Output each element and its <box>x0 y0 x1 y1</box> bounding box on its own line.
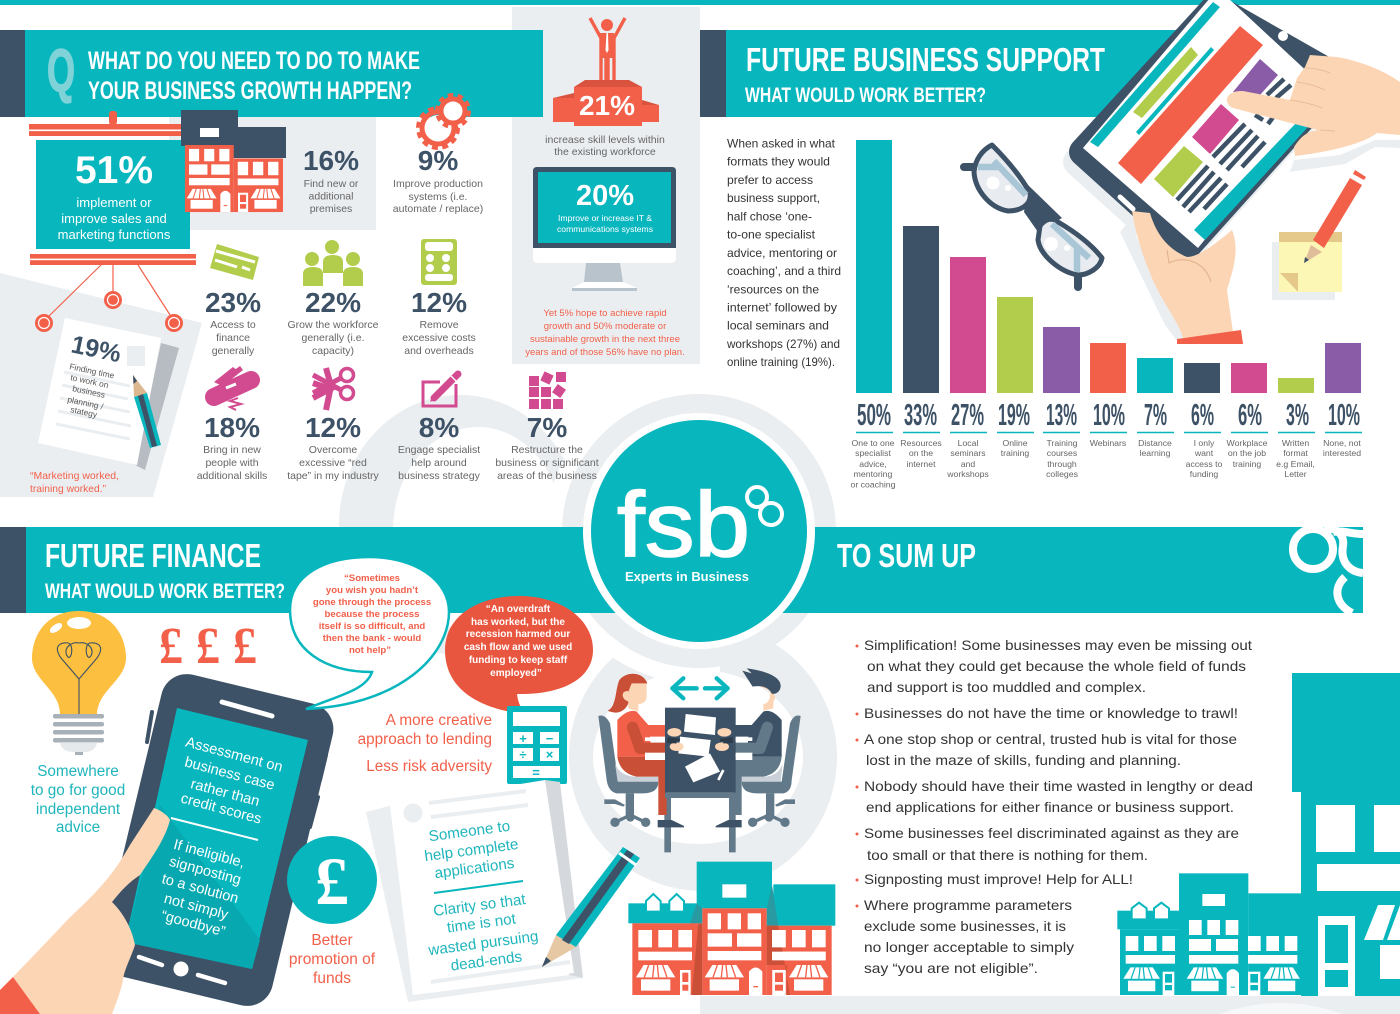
note page: 19% planning: 19% <box>69 330 124 368</box>
note: growth plans: Yet 5% hope to achieve rapid <box>543 308 667 319</box>
fsb logo <box>583 413 815 649</box>
bar labels: interested <box>1323 448 1361 458</box>
bar values: 7% <box>1144 397 1167 432</box>
strapline: Experts in Business <box>625 570 749 584</box>
summary bullet list: and support is too muddled and complex. <box>867 679 1146 695</box>
heading line 2: YOUR BUSINESS GROWTH HAPPEN? <box>88 77 412 105</box>
bar labels: internet <box>907 459 936 469</box>
phone text: Assessment on <box>184 734 284 776</box>
stat: 12% remove costs: Remove <box>419 319 459 331</box>
pound coin <box>287 836 377 924</box>
bar values: 50% <box>857 397 891 432</box>
bar labels: Letter <box>1284 469 1307 479</box>
note page: 19% planning: stategy <box>70 404 99 420</box>
man chair <box>742 715 801 827</box>
stat: 9% production systems: systems (i.e. <box>409 191 467 203</box>
summary bullet list: Where programme parameters <box>864 897 1072 913</box>
bar labels: Training <box>1046 438 1078 448</box>
bar labels: Written <box>1282 438 1309 448</box>
stat: 22% grow the workforce: generally (i.e. <box>301 332 365 344</box>
header: growth question <box>0 30 543 117</box>
bar labels: training <box>1001 448 1029 458</box>
bar chart: preferred support formats <box>851 140 1362 490</box>
text: independent advice: independent <box>36 801 121 818</box>
text: better promotion <box>289 932 376 987</box>
grey panel behind 16% stat <box>169 117 376 230</box>
stat: 8% specialist help: help around <box>411 457 467 469</box>
stat: 18% new people: Bring in new <box>203 444 261 456</box>
icon: calculator green <box>421 239 457 285</box>
grey disc behind meeting scene <box>569 623 837 891</box>
note page: 19% planning <box>38 318 179 470</box>
bar labels: Online <box>1002 438 1028 448</box>
right hand <box>1227 55 1400 156</box>
tablet with hands <box>1083 0 1400 344</box>
pound signs: £ <box>233 618 257 675</box>
bar values: 10% <box>1328 397 1360 432</box>
phone text: credit scores <box>179 791 263 828</box>
summary bullet list: exclude some businesses, it is <box>864 918 1066 934</box>
speech bubble: overdraft: has worked, but the <box>471 617 565 628</box>
bar values: 6% <box>1238 397 1262 432</box>
quote: marketing worked: “Marketing worked, <box>30 471 119 482</box>
bar labels: Distance <box>1138 438 1172 448</box>
icon: calculator teal: ÷ <box>519 747 527 762</box>
bar labels: access to <box>1186 459 1223 469</box>
woman chair <box>598 715 658 827</box>
intro paragraph: business support: internet’ followed by <box>727 301 837 315</box>
speech bubble: overdraft: cash flow and we used <box>464 642 572 653</box>
intro paragraph: business support: online training (19%). <box>727 355 835 369</box>
bar labels: on the <box>909 448 933 458</box>
document: applications and clarity: time is not <box>446 910 518 936</box>
large teal building <box>1292 673 1400 996</box>
note: growth plans <box>525 308 685 358</box>
stat: 18% new people: 18% <box>204 412 260 443</box>
speech bubble: overdraft <box>445 596 593 714</box>
stat: 18% new people: people with <box>205 457 259 469</box>
speech bubble: process: itself is so difficult, and <box>319 621 425 632</box>
grey panel behind 21% and 20% stats <box>512 7 700 364</box>
speech bubble: process: then the bank - would <box>323 633 421 644</box>
text: creative lending: Less risk adversity <box>366 758 492 775</box>
bar labels: None, not <box>1323 438 1361 448</box>
stat: 12% red tape <box>287 412 380 482</box>
grey ring around logo <box>562 394 836 668</box>
intro paragraph: business support: local seminars and <box>727 319 829 333</box>
stat: 16% premises: premises <box>310 203 352 215</box>
caption: 21% skill levels: the existing workforce <box>554 146 656 158</box>
pound signs <box>159 618 257 675</box>
icon: multi-tool <box>214 366 251 410</box>
stat: 9% production systems: automate / replace) <box>393 203 483 215</box>
header: future business support <box>700 30 1190 117</box>
header: future finance <box>0 527 1363 613</box>
coral shops <box>628 862 835 995</box>
note: growth plans: growth and 50% moderate or <box>544 321 666 332</box>
stat: 8% specialist help: Engage specialist <box>398 444 480 456</box>
speech bubble: process: gone through the process <box>313 597 431 608</box>
pound signs: £ <box>159 618 183 675</box>
summary bullet list <box>856 637 1253 976</box>
sign: 51% sales and marketing: implement or <box>76 195 152 210</box>
icon: scissors <box>313 368 354 410</box>
quote: marketing worked: training worked.” <box>30 484 107 495</box>
intro paragraph: business support: to-one specialist <box>727 228 816 242</box>
stat: 8% specialist help <box>398 412 481 482</box>
stat: 7% restructure <box>495 412 599 482</box>
fsb wordmark: fsb <box>617 474 750 576</box>
bar labels: Webinars <box>1090 438 1127 448</box>
stat: 16% premises <box>303 145 359 215</box>
phone with hand <box>0 669 339 1014</box>
teal shops <box>1117 873 1305 995</box>
grey panel behind note page <box>0 273 202 497</box>
bar labels: colleges <box>1046 469 1079 479</box>
note page: 19% planning: Finding time <box>69 361 116 381</box>
icon: calculator teal: = <box>532 765 540 780</box>
monitor: 20% IT systems: Improve or increase IT & <box>558 213 652 223</box>
document: applications and clarity: help complete <box>423 836 519 865</box>
intro paragraph: business support: advice, mentoring or <box>727 246 837 260</box>
pound signs: £ <box>196 618 220 675</box>
white band around logo ring <box>554 459 720 678</box>
stat: 22% grow the workforce: 22% <box>305 287 361 318</box>
man <box>716 668 782 827</box>
title: FUTURE BUSINESS SUPPORT <box>746 41 1105 78</box>
summary bullet list: Signposting must improve! Help for ALL! <box>864 871 1133 887</box>
bar labels: I only <box>1194 438 1215 448</box>
bar values: 27% <box>951 397 984 432</box>
pound coin: £ <box>315 843 349 919</box>
intro paragraph: business support: workshops (27%) and <box>726 337 840 351</box>
speech bubble: process: not help” <box>349 645 391 656</box>
summary bullet list: no longer acceptable to simply <box>864 939 1074 955</box>
text: better promotion: funds <box>313 970 351 987</box>
icon: calculator teal <box>507 706 567 784</box>
summary bullet list: on what they could get because the whole field of funds <box>867 658 1246 674</box>
stat: 7% restructure: business or significant <box>495 457 599 469</box>
bar values: 13% <box>1046 397 1077 432</box>
document: applications and clarity: Clarity so that <box>432 891 527 920</box>
bar labels: training <box>1233 459 1261 469</box>
summary bullet list: Businesses do not have the time or knowledge to trawl! <box>864 705 1238 721</box>
bar values: 19% <box>998 397 1030 432</box>
text: independent advice <box>31 763 125 836</box>
to sum up heading: TO SUM UP <box>837 537 976 574</box>
lower hand <box>1132 211 1236 338</box>
quote: marketing worked <box>30 471 119 495</box>
document: applications and clarity <box>366 780 583 1002</box>
intro paragraph: business support: prefer to access <box>727 173 813 187</box>
summary bullet list: end applications for either finance or business support. <box>866 799 1234 815</box>
bar labels: workshops <box>946 469 989 479</box>
summary bullet list: Some businesses feel discriminated against as they are <box>864 825 1239 841</box>
sign: 51% sales and marketing: marketing functions <box>58 227 171 242</box>
stat: 9% production systems <box>393 145 483 215</box>
text: creative lending: approach to lending <box>358 731 492 748</box>
stat: 16% premises: 16% <box>303 145 359 176</box>
heading line 1: WHAT DO YOU NEED TO DO TO MAKE <box>88 47 420 75</box>
intro paragraph: business support: formats they would <box>727 155 830 169</box>
bar labels: or coaching <box>851 480 896 490</box>
text: better promotion: promotion of <box>289 951 376 968</box>
stat: 22% grow the workforce: Grow the workforce <box>287 319 379 331</box>
stat: 12% remove costs: 12% <box>411 287 467 318</box>
phone text: business case <box>183 754 276 794</box>
arrows <box>672 678 728 698</box>
bar labels: learning <box>1140 448 1171 458</box>
pencil teal <box>542 847 640 967</box>
sign: 51% sales and marketing: improve sales and <box>61 211 167 226</box>
bar labels: One to one <box>852 438 895 448</box>
caption: 21% skill levels: increase skill levels within <box>545 134 665 146</box>
bar values: 6% <box>1191 397 1214 432</box>
intro paragraph: business support <box>726 136 841 369</box>
phone text <box>159 734 284 940</box>
stat: 12% remove costs <box>402 287 476 357</box>
document: applications and clarity: dead-ends <box>450 948 524 975</box>
sleeve <box>1177 330 1243 344</box>
stat: 12% red tape: 12% <box>305 412 361 443</box>
bar values: 10% <box>1093 397 1125 432</box>
bar labels: want <box>1194 448 1214 458</box>
summary bullet list: A one stop shop or central, trusted hub is vital for those <box>864 731 1237 747</box>
icon: blocks <box>529 371 566 409</box>
icon: calculator teal: − <box>546 731 554 746</box>
stat: 12% remove costs: and overheads <box>404 345 474 357</box>
document: applications and clarity: Someone to <box>428 818 511 845</box>
speech bubble: process <box>290 557 449 709</box>
bar labels: courses <box>1047 448 1078 458</box>
intro paragraph: business support: half chose ‘one- <box>727 209 812 223</box>
bar values: 33% <box>904 397 937 432</box>
speech bubble: process: because the process <box>325 609 419 620</box>
phone text: rather than <box>189 776 261 810</box>
stat: 22% grow the workforce <box>287 287 379 357</box>
note page: 19% planning: to work on <box>70 372 110 390</box>
intro paragraph: business support: business support, <box>727 191 820 205</box>
stat: 18% new people <box>197 412 267 482</box>
text: independent advice: to go for good <box>31 782 125 799</box>
sign: 51% sales and marketing <box>29 111 196 332</box>
phone text: to a solution <box>160 871 240 907</box>
phone text: signposting <box>167 854 243 888</box>
subtitle: WHAT WOULD WORK BETTER? <box>745 84 986 107</box>
letter Q: Q <box>47 37 75 104</box>
phone text: If ineligible, <box>172 837 246 871</box>
table <box>665 708 736 793</box>
text: better promotion: Better <box>311 932 353 949</box>
speech bubble: overdraft: recession harmed our <box>466 629 570 640</box>
note page: 19% planning: business <box>72 383 106 400</box>
icon: calculator teal: + <box>519 731 527 746</box>
document: applications and clarity: wasted pursuing <box>426 928 539 959</box>
icon: person on podium <box>553 18 659 126</box>
stat: 18% new people: additional skills <box>197 470 267 482</box>
stat: 12% red tape: Overcome <box>309 444 357 456</box>
text: independent advice: Somewhere <box>37 763 119 780</box>
sticky note with pencil <box>1272 170 1366 300</box>
stat: 23% access to finance: finance <box>216 332 250 344</box>
bar values <box>857 397 1360 432</box>
text: independent advice: advice <box>56 819 100 836</box>
title: FUTURE FINANCE <box>45 537 261 574</box>
stat: 22% grow the workforce: capacity) <box>312 345 354 357</box>
icon: shop building <box>181 110 286 212</box>
subtitle: WHAT WOULD WORK BETTER? <box>45 580 285 603</box>
speech bubble: overdraft: funding to keep staff <box>469 655 568 666</box>
speech bubble: overdraft: employed” <box>490 668 542 679</box>
bar labels: e.g Email, <box>1276 459 1315 469</box>
bar labels: funding <box>1190 469 1218 479</box>
note: growth plans: years and of those 56% have no plan. <box>525 347 685 358</box>
summary bullet list: Simplification! Some businesses may even be missing out <box>864 637 1252 653</box>
stat: 16% premises: Find new or <box>304 178 359 190</box>
caption: 21% skill levels <box>545 134 665 158</box>
header corner logo mark <box>1293 529 1363 613</box>
intro paragraph: business support: ‘resources on the <box>727 282 819 296</box>
stat: 16% premises: additional <box>309 190 353 202</box>
bar labels: mentoring <box>854 469 892 479</box>
sleeve <box>0 977 40 1014</box>
stat: 9% production systems: 9% <box>418 145 458 176</box>
stat: 9% production systems: Improve production <box>393 178 483 190</box>
document: applications and clarity: applications <box>434 855 516 882</box>
bar labels: and <box>961 459 975 469</box>
sign: 51% sales and marketing: 51% <box>75 149 153 192</box>
stat: 23% access to finance: 23% <box>205 287 261 318</box>
bar labels: advice, <box>859 459 887 469</box>
logo symbol <box>747 487 782 525</box>
icon: credit card <box>210 244 259 280</box>
icon: lightbulb <box>32 611 126 755</box>
intro paragraph: business support: coaching’, and a third <box>727 264 841 278</box>
bar labels: on the job <box>1228 448 1266 458</box>
white spot behind meeting scene <box>593 670 803 844</box>
bar values: 3% <box>1286 397 1309 432</box>
bottom grey strip <box>700 996 1400 1014</box>
text: creative lending <box>358 712 492 775</box>
stat: 12% red tape: excessive “red <box>299 457 367 469</box>
stat: 12% remove costs: excessive costs <box>402 332 476 344</box>
icon: people group <box>303 240 363 286</box>
bar labels: seminars <box>950 448 986 458</box>
summary bullet list: say “you are not eligible”. <box>864 960 1038 976</box>
decorative grey arc left of logo <box>339 395 581 655</box>
tablet shadow <box>1077 18 1332 256</box>
bar labels: Local <box>958 438 978 448</box>
stat: 23% access to finance: Access to <box>210 319 256 331</box>
bar labels: Resources <box>900 438 942 448</box>
monitor: 20% IT systems <box>533 167 676 291</box>
woman <box>608 674 684 827</box>
note page: 19% planning: planning / <box>67 394 105 412</box>
pencil <box>133 375 161 448</box>
stat: 23% access to finance <box>205 287 261 357</box>
stat: 7% restructure: Restructure the <box>511 444 583 456</box>
bar labels: through <box>1047 459 1077 469</box>
table legs <box>668 797 732 852</box>
icon: gears <box>418 95 469 148</box>
background top bar <box>0 0 1400 5</box>
summary bullet list: lost in the maze of skills, funding and planning. <box>866 752 1181 768</box>
speech bubble: overdraft: “An overdraft <box>486 604 551 615</box>
icon: edit note <box>423 374 458 406</box>
hand <box>13 808 170 1014</box>
stat: 8% specialist help: 8% <box>419 412 459 443</box>
meeting scene <box>598 668 801 852</box>
speech bubble: process: “Sometimes <box>344 573 400 584</box>
note: growth plans: sustainable growth in the next three <box>530 334 680 345</box>
text: creative lending: A more creative <box>386 712 492 729</box>
bar labels: specialist <box>855 448 891 458</box>
intro paragraph: business support: When asked in what <box>727 136 836 150</box>
stat: 8% specialist help: business strategy <box>398 470 481 482</box>
monitor: 20% IT systems: 20% <box>576 180 634 212</box>
monitor: 20% IT systems: communications systems <box>557 224 653 234</box>
stat: 7% restructure: areas of the business <box>497 470 597 482</box>
bar labels: format <box>1283 448 1308 458</box>
icon: person on podium: 21% <box>579 90 635 121</box>
stat: 7% restructure: 7% <box>527 412 567 443</box>
summary bullet list: Nobody should have their time wasted in lengthy or dead <box>864 778 1253 794</box>
bar labels: Workplace <box>1227 438 1268 448</box>
icon: glasses <box>964 145 1102 287</box>
icon: calculator teal: × <box>546 747 554 762</box>
bar labels <box>851 438 1361 490</box>
stat: 12% red tape: tape” in my industry <box>287 470 380 482</box>
speech bubble: process: you wish you hadn’t <box>326 585 419 596</box>
phone text: “goodbye” <box>159 908 227 940</box>
stat: 23% access to finance: generally <box>212 345 255 357</box>
phone text: not simply <box>162 891 231 924</box>
summary bullet list: too small or that there is nothing for them. <box>867 847 1148 863</box>
